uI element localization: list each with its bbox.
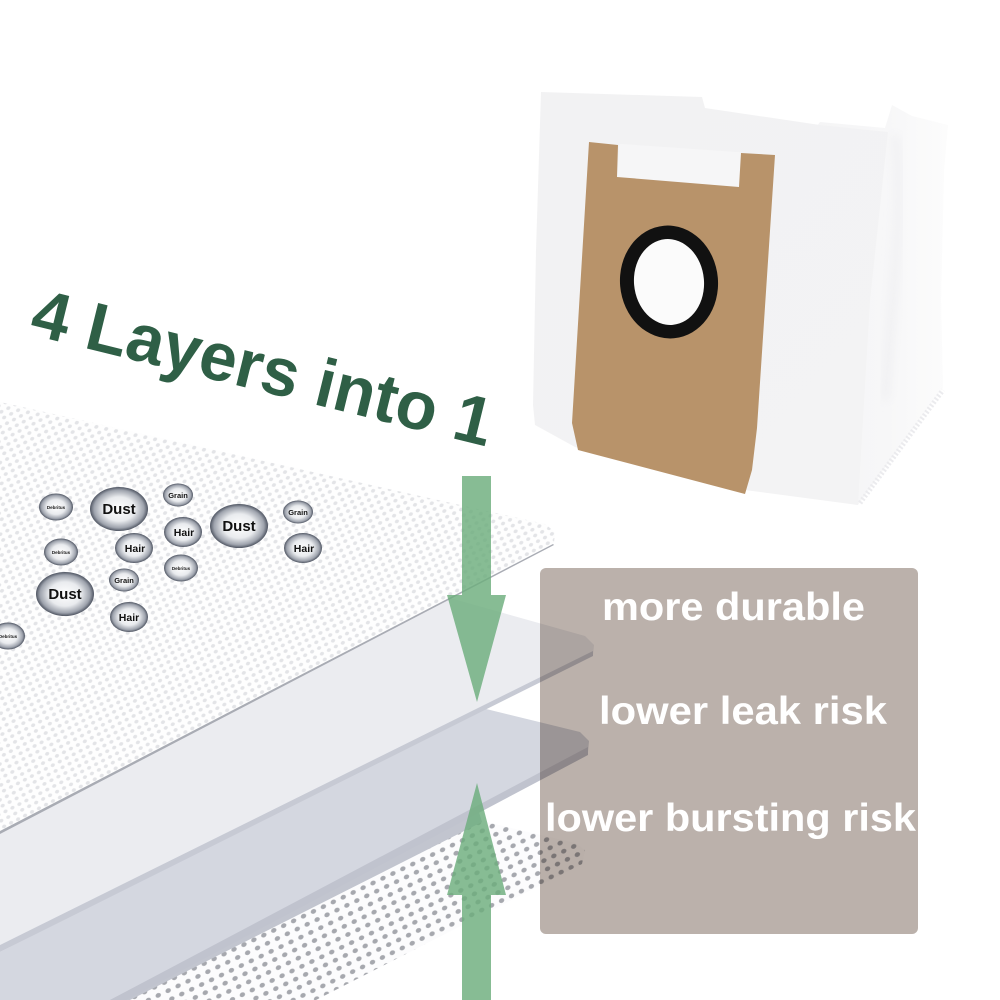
arrow: pointing up <box>447 783 506 1000</box>
dust particles on top layer: Debritus <box>52 550 71 555</box>
benefit: bursting risk: lower bursting risk <box>545 797 916 840</box>
seal ring <box>615 221 723 343</box>
bag side gusset <box>745 105 948 505</box>
dust particles on top layer: Debritus <box>47 505 66 510</box>
seal opening <box>630 236 708 328</box>
panel: benefits <box>540 568 918 934</box>
dust particles on top layer: Dust <box>48 586 82 603</box>
layer 2: pale membrane sheet <box>0 598 594 952</box>
dust particles on top layer: Grain <box>114 576 134 585</box>
dust particles on top layer: Hair <box>174 527 194 539</box>
product: dust bag <box>533 92 948 505</box>
dust particles on top layer <box>0 484 322 650</box>
dust particles on top layer: Grain <box>288 508 308 517</box>
layer 1: fine dotted sheet <box>0 402 555 834</box>
dust particles on top layer: Dust <box>102 501 136 518</box>
dust particles on top layer: Hair <box>294 543 314 555</box>
benefit: durability: more durable <box>602 586 865 629</box>
dust particles on top layer: Dust <box>222 518 256 535</box>
dust particles on top layer: Hair <box>119 612 139 624</box>
dust particles on top layer: Hair <box>125 543 145 555</box>
cardboard plate <box>572 142 775 494</box>
bag stitched hem <box>860 390 943 503</box>
bag front <box>533 92 888 505</box>
title: 4 Layers into 1 <box>24 275 501 461</box>
dust particles on top layer: Debritus <box>172 566 191 571</box>
dust particles on top layer: Grain <box>168 491 188 500</box>
bag hanger window <box>617 144 741 188</box>
arrow: pointing down <box>447 476 506 702</box>
layer 4: coarse dotted sheet <box>100 809 585 1000</box>
bag side folds <box>885 135 899 400</box>
layer 3: solid grey-blue sheet <box>0 708 589 1000</box>
benefit: leak risk: lower leak risk <box>599 690 887 733</box>
